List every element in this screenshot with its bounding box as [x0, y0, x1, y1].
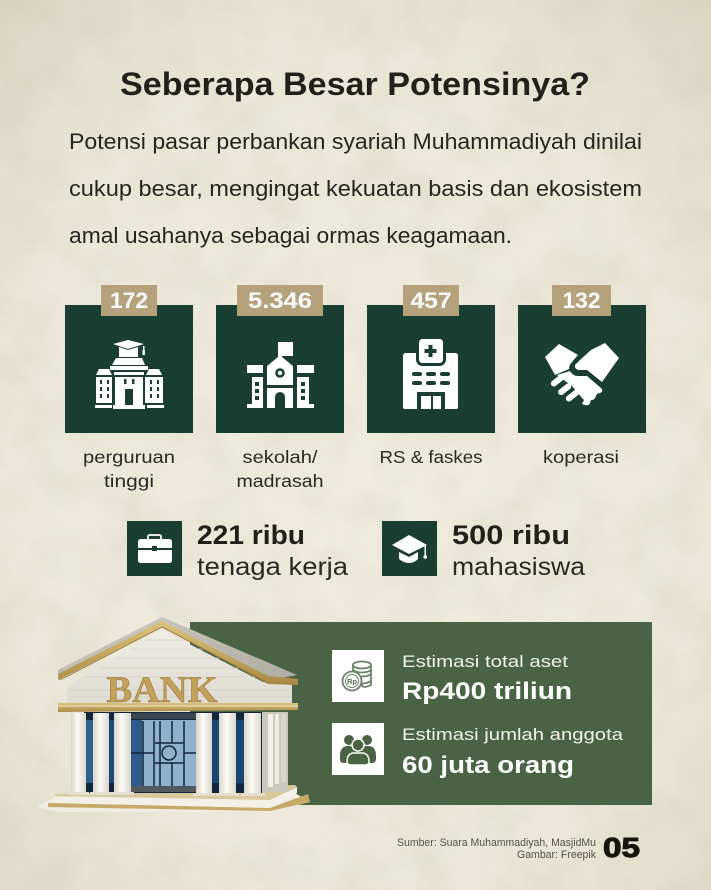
value tag: 457	[403, 285, 459, 316]
sign BANK: BANK	[106, 670, 218, 711]
icon: university	[95, 340, 164, 409]
intro paragraph: amal usahanya sebagai ormas keagamaan.	[69, 223, 512, 248]
value tag: 172: 172	[110, 288, 148, 313]
label: madrasah	[236, 471, 324, 491]
label: koperasi	[543, 447, 619, 467]
card: sekolah/madrasah	[216, 285, 344, 491]
icon: hospital	[403, 338, 458, 409]
icon: graduation cap	[392, 535, 427, 563]
title: Seberapa Besar Potensinya?	[120, 66, 590, 102]
label: sekolah/	[242, 447, 318, 467]
stat: tenaga kerja: tenaga kerja	[197, 553, 348, 581]
intro paragraph: Potensi pasar perbankan syariah Muhammadiyah dinilai	[69, 129, 642, 154]
card: RS dan faskes	[367, 285, 495, 467]
stat: mahasiswa: mahasiswa	[452, 553, 585, 581]
value tag: 132	[552, 285, 611, 316]
source credit: Sumber: Suara Muhammadiyah, MasjidMu	[397, 837, 596, 849]
icon: people	[332, 723, 384, 775]
label: RS & faskes	[380, 447, 483, 467]
illustration: bank building	[37, 617, 310, 812]
panel: estimasi	[190, 622, 652, 805]
icon: coins rupiah	[332, 650, 384, 702]
icon: school	[247, 342, 314, 408]
label	[236, 447, 324, 491]
icon: handshake	[545, 343, 619, 405]
card: koperasi	[518, 285, 646, 467]
label	[83, 447, 175, 491]
page number: 05	[603, 832, 640, 863]
intro paragraph	[69, 129, 642, 248]
text: total aset: Estimasi total aset	[402, 652, 568, 671]
card: perguruan tinggi	[65, 285, 193, 491]
text: jumlah anggota	[402, 725, 624, 779]
value tag: 457: 457	[410, 288, 452, 313]
source credit: Gambar: Freepik	[517, 849, 596, 861]
value tag: 172	[101, 285, 157, 316]
value tag: 5.346	[237, 285, 323, 316]
text: jumlah anggota: Estimasi jumlah anggota	[402, 725, 624, 744]
stat: tenaga kerja	[127, 520, 348, 581]
text: total aset: Rp400 triliun	[402, 678, 572, 705]
label: tinggi	[104, 471, 154, 491]
value tag: 132: 132	[562, 288, 600, 313]
stat: mahasiswa	[382, 520, 585, 581]
label: perguruan	[83, 447, 175, 467]
icon: coins rupiah: Rp	[347, 677, 357, 686]
text: jumlah anggota: 60 juta orang	[402, 752, 574, 779]
text: total aset	[402, 652, 572, 705]
value tag: 5.346: 5.346	[248, 288, 312, 313]
stat: mahasiswa: 500 ribu	[452, 520, 570, 550]
intro paragraph: cukup besar, mengingat kekuatan basis dan ekosistem	[69, 176, 642, 201]
stat: tenaga kerja: 221 ribu	[197, 520, 305, 550]
source credit	[397, 837, 596, 861]
icon: briefcase	[138, 535, 172, 563]
